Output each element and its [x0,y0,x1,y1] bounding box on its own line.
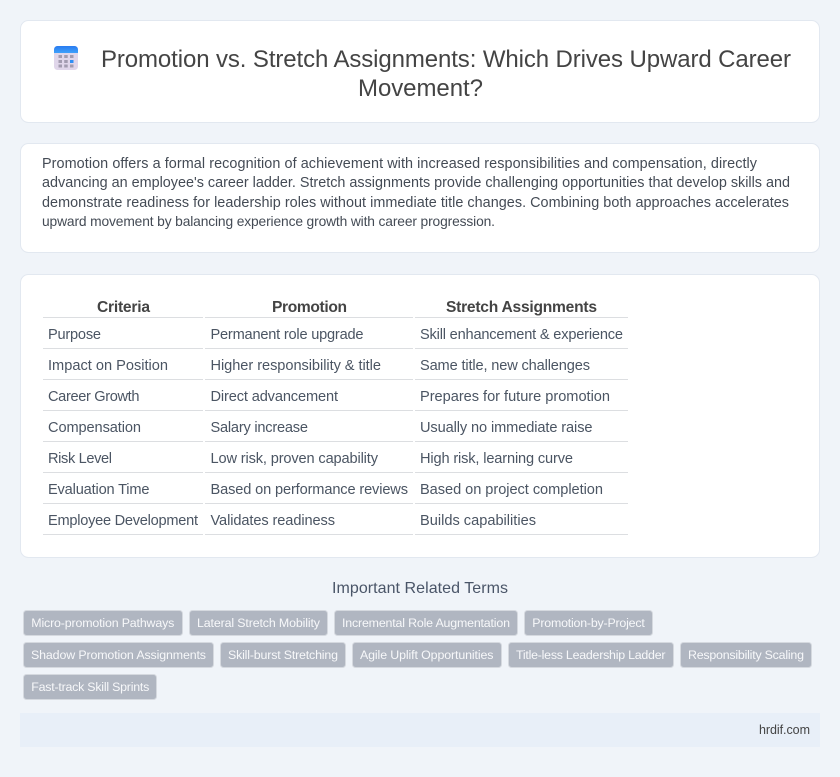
footer bar: hrdif.com [759,723,810,737]
panel: comparison table [20,274,820,558]
tag group: related terms [24,610,812,700]
tag: Agile Uplift Opportunities [360,648,494,662]
text block: summary [42,156,790,229]
tag [508,642,674,668]
tag: Fast-track Skill Sprints [31,680,149,694]
tag [24,674,156,700]
text block: summary: upward movement by balancing experience growth with career progression. [42,214,495,229]
tag: Lateral Stretch Mobility [197,616,321,630]
column: promotion: Permanent role upgrade [210,327,364,343]
column: criteria: Purpose [48,327,101,343]
tag: Incremental Role Augmentation [342,616,510,630]
table header: Criteria [97,299,150,316]
title: Promotion vs. Stretch Assignments: Which Drives Upward Career [101,46,791,73]
column: stretch assignments: High risk, learning curve [420,451,573,467]
table header [97,299,597,316]
column: stretch assignments: Builds capabilities [420,513,536,529]
tag [220,642,346,668]
tag [24,642,214,668]
column: criteria: Compensation [48,420,141,436]
tag: Title-less Leadership Ladder [516,648,666,662]
text block: summary: Promotion offers a formal recognition of achievement with increased responsibilities and compensation, directly [42,156,758,172]
column: stretch assignments: Skill enhancement & experience [420,327,623,343]
tag [352,642,502,668]
title [101,46,791,102]
text block: summary: advancing an employee's career ladder. Stretch assignments provide challenging opportunities that develop skills and [42,175,790,191]
column: stretch assignments: Same title, new challenges [420,358,590,374]
column: criteria: Risk Level [48,451,112,467]
tag [190,610,328,636]
text block: summary: demonstrate readiness for leadership roles without immediate title changes. Combining both approaches accelerates [42,195,789,211]
column: promotion: Validates readiness [210,513,335,529]
column: promotion: Based on performance reviews [210,482,408,498]
column: stretch assignments: Based on project completion [420,482,603,498]
tag: Micro-promotion Pathways [31,616,174,630]
heading: related terms: Important Related Terms [332,580,508,597]
footer bar [20,713,820,747]
column: promotion: Salary increase [210,420,308,436]
tag [334,610,518,636]
panel: summary paragraph [20,144,820,252]
table rules [43,317,628,535]
table header: Stretch Assignments [446,299,597,316]
tag: Shadow Promotion Assignments [31,648,206,662]
icon: calendar [54,46,78,70]
column: stretch assignments [420,327,623,529]
column: promotion: Low risk, proven capability [210,451,379,467]
column: promotion [210,327,408,529]
panel: title header [20,20,820,122]
column: promotion: Higher responsibility & title [210,358,381,374]
tag: Promotion-by-Project [532,616,645,630]
table header: Promotion [272,299,347,316]
tag [680,642,812,668]
column: stretch assignments: Usually no immediate raise [420,420,592,436]
column: promotion: Direct advancement [210,389,338,405]
title: Movement? [358,75,483,102]
tag [524,610,652,636]
tag: Responsibility Scaling [688,648,804,662]
column: stretch assignments: Prepares for future promotion [420,389,610,405]
column: criteria: Employee Development [48,513,198,529]
column: criteria: Career Growth [48,389,140,405]
column: criteria: Evaluation Time [48,482,150,498]
tag: Skill-burst Stretching [228,648,338,662]
tag [24,610,182,636]
column: criteria: Impact on Position [48,358,168,374]
column: criteria [48,327,198,529]
